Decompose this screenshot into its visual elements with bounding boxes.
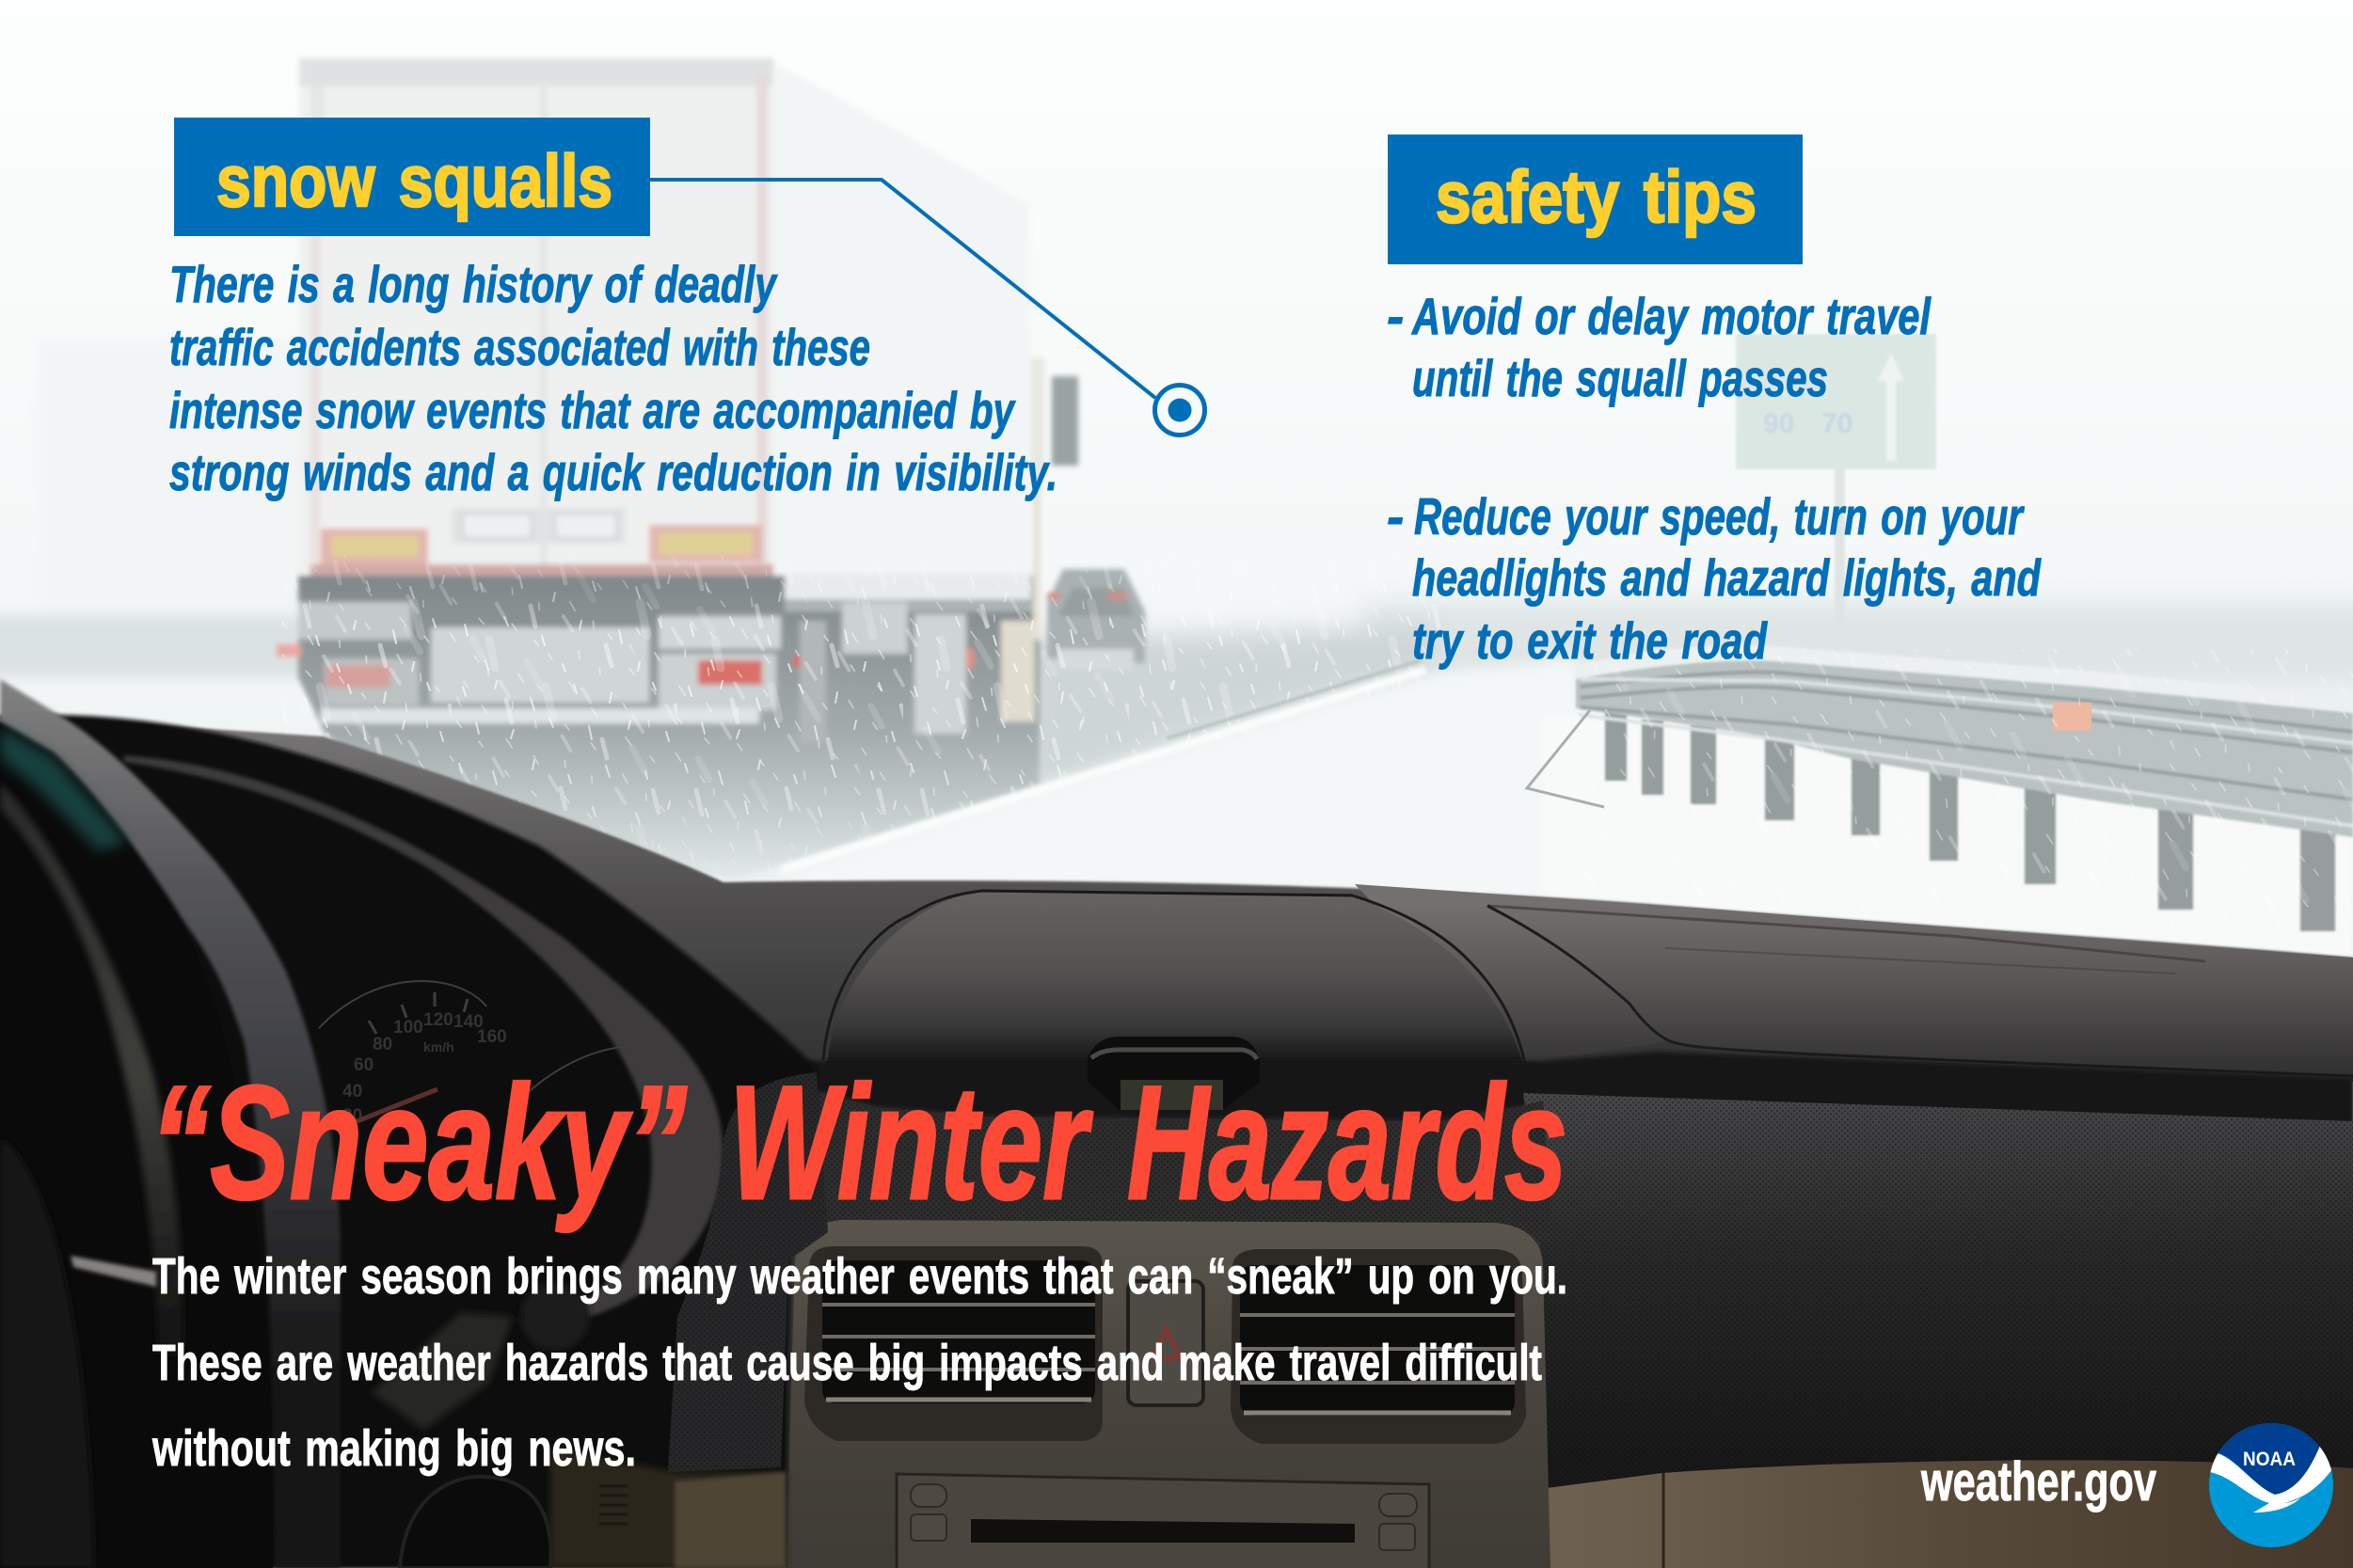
right air vent [1231,1249,1526,1444]
binnacle hood stripe [124,755,723,1317]
distant building left [38,339,310,621]
tip 2: Reduce your speed, turn on your [1414,487,2025,546]
speedometer gauge: 160 [477,1027,507,1047]
speedometer gauge: 40 [342,1082,362,1101]
speedometer gauge: 80 [373,1035,392,1054]
description text: There is a long history of deadly [169,255,778,313]
ignition [400,1477,551,1568]
website link: weather.gov [1920,1451,2156,1513]
bumper [431,627,649,703]
title: “Sneaky” [151,1053,687,1233]
left air vent [804,1246,1103,1441]
speedometer gauge: 140 [453,1012,484,1032]
description text: strong winds and a quick reduction in visibility. [169,443,1057,501]
rear reflective bands [321,525,762,564]
car interior: dashboard [0,679,2353,1568]
wheel inner strip [0,784,183,1354]
dotted panel left of console [668,1072,828,1472]
background: snowy road seen through windshield [0,0,2353,956]
title [151,1053,1567,1233]
description text [169,255,1057,501]
icon: NOAA logo [2209,1423,2333,1547]
roadside haze right of truck [753,626,1439,879]
rear lights [698,660,762,685]
center dash hump [820,891,1527,1077]
binnacle and left dark area [0,715,817,1568]
plate details [452,508,626,544]
truck rear panel [299,58,773,574]
truck side lower lip [785,574,1031,600]
title: Hazards [1127,1053,1567,1233]
speedometer gauge: 120 [423,1010,453,1030]
distant tree line left [0,616,329,677]
curb near rail [1527,710,1604,807]
teal reflection [0,726,127,851]
highway sign: 70 [1821,408,1852,439]
road [724,658,2353,959]
tip 2: headlights and hazard lights, and [1412,548,2042,607]
highway sign [1736,334,1936,648]
panel: snow squalls [169,118,1204,501]
seam in beige panel [1661,1473,1665,1568]
truck [277,58,1449,903]
speedometer gauge: 100 [393,1018,423,1037]
tip 2: try to exit the road [1412,611,1768,670]
falling snow over truck [282,555,1441,862]
glovebox handle [1088,1037,1260,1110]
car ahead [1047,569,1145,663]
orange reflector [2053,703,2091,731]
icon: NOAA logo: NOAA [2243,1449,2296,1470]
radio [897,1474,1429,1568]
top edge strip of right dash [1487,906,2205,961]
vent grille on tan panel [599,1486,628,1524]
tip 1: Avoid or delay motor travel [1410,287,1932,345]
stalk controls [372,1283,589,1430]
tip 1: - [1387,287,1404,345]
guardrail posts [1605,710,2335,931]
description text: intense snow events that are accompanied by [169,381,1016,439]
hazard button [1128,1281,1203,1405]
heading: snow squalls: snow squalls [216,139,612,222]
highway sign: 90 [1763,408,1794,439]
beige lower right panel [1534,1460,2353,1568]
wheel rim highlight [0,679,341,1568]
speedometer gauge [11,981,637,1129]
underside and snow haze [298,576,1040,879]
dark band under hump [800,1052,2353,1143]
speedometer gauge: 20 [342,1106,362,1126]
tip 2 [1387,487,2042,670]
guardrail [1527,645,2353,931]
heading: safety tips: safety tips [1436,155,1757,238]
dotted dash panel [1523,1093,2353,1489]
truck side panel [767,58,1030,600]
tan left panel [550,1449,786,1568]
wheel inner [0,721,273,1568]
right dash panel [1355,884,2353,1082]
tip 2: - [1387,487,1404,546]
steering wheel [0,679,341,1568]
speedometer gauge: km/h [423,1039,454,1054]
title: Winter [729,1053,1093,1233]
side panels [785,602,1039,611]
mirror [1052,376,1078,466]
intro text [151,1248,1567,1477]
wiper stalk [71,1256,156,1287]
snow over guardrail [1576,649,2353,931]
leader line pointing to truck [650,180,1204,435]
top rear trim [299,58,773,87]
intro text: The winter season brings many weather events that can “sneak” up on you. [152,1248,1567,1305]
description text: traffic accidents associated with these [169,318,870,376]
speedometer gauge: 60 [354,1055,374,1075]
intro text: without making big news. [151,1420,636,1477]
intro text: These are weather hazards that cause big impacts and make travel difficult [152,1335,1542,1391]
distant tree line right [1364,602,2353,687]
heading box [1388,135,1803,264]
dotted strip above vents [790,1091,1552,1242]
heading box [174,118,650,236]
dashboard base [0,715,2353,1568]
rail [1576,645,2353,837]
tip 1 [1387,287,1932,407]
center console [786,1220,1550,1568]
wheel spoke [0,1138,94,1568]
tip 1: until the squall passes [1412,349,1828,407]
lighter tan sliver [675,1472,786,1568]
panel: safety tips [1387,135,2042,670]
